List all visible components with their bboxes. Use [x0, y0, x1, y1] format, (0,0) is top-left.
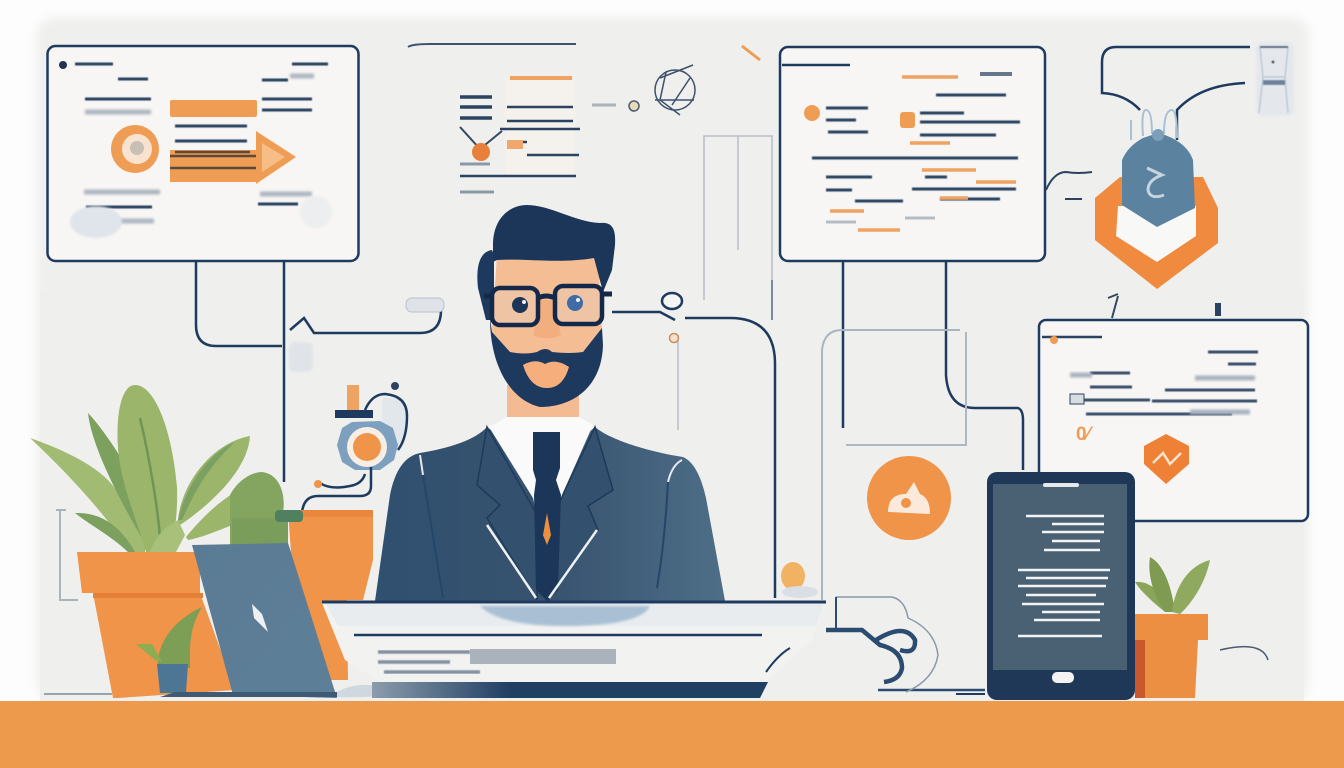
panel: top centre notes — [408, 44, 760, 192]
shirt — [489, 417, 593, 520]
small connector parts — [289, 293, 818, 598]
panel: lower right diagram: 0⁄ — [1076, 424, 1094, 445]
hair — [493, 205, 615, 292]
lapels — [477, 427, 613, 599]
head — [492, 255, 602, 400]
plant: large potted plant — [30, 385, 373, 698]
arrow graphic — [170, 100, 296, 184]
person — [375, 205, 725, 601]
connector lines — [44, 136, 1268, 694]
pot: large — [77, 552, 235, 698]
suit — [375, 427, 725, 601]
beard — [490, 318, 603, 407]
orange floor band — [0, 701, 1344, 768]
panel: top right diagram — [780, 47, 1045, 261]
neck — [507, 385, 579, 440]
tablet — [987, 472, 1135, 700]
keyboard device on desk — [322, 602, 826, 698]
pot: rear — [288, 510, 373, 680]
icon: orange shield tag — [1095, 42, 1294, 289]
icon: network sketch — [655, 65, 695, 115]
glasses — [492, 286, 602, 325]
icon: target — [111, 125, 159, 173]
icon: orange circle badge — [867, 456, 951, 540]
laptop — [160, 543, 383, 698]
tie — [533, 432, 561, 601]
nose — [533, 300, 561, 338]
panel: lower right diagram — [1039, 294, 1308, 521]
plant: small potted plant — [1135, 557, 1210, 698]
cable knot — [826, 597, 985, 692]
icon: gear with orange core — [302, 382, 407, 512]
back hair — [477, 250, 494, 320]
device at end of wire — [1256, 42, 1294, 116]
icon: small shield — [1144, 434, 1189, 484]
panel: top left diagram — [48, 46, 358, 261]
